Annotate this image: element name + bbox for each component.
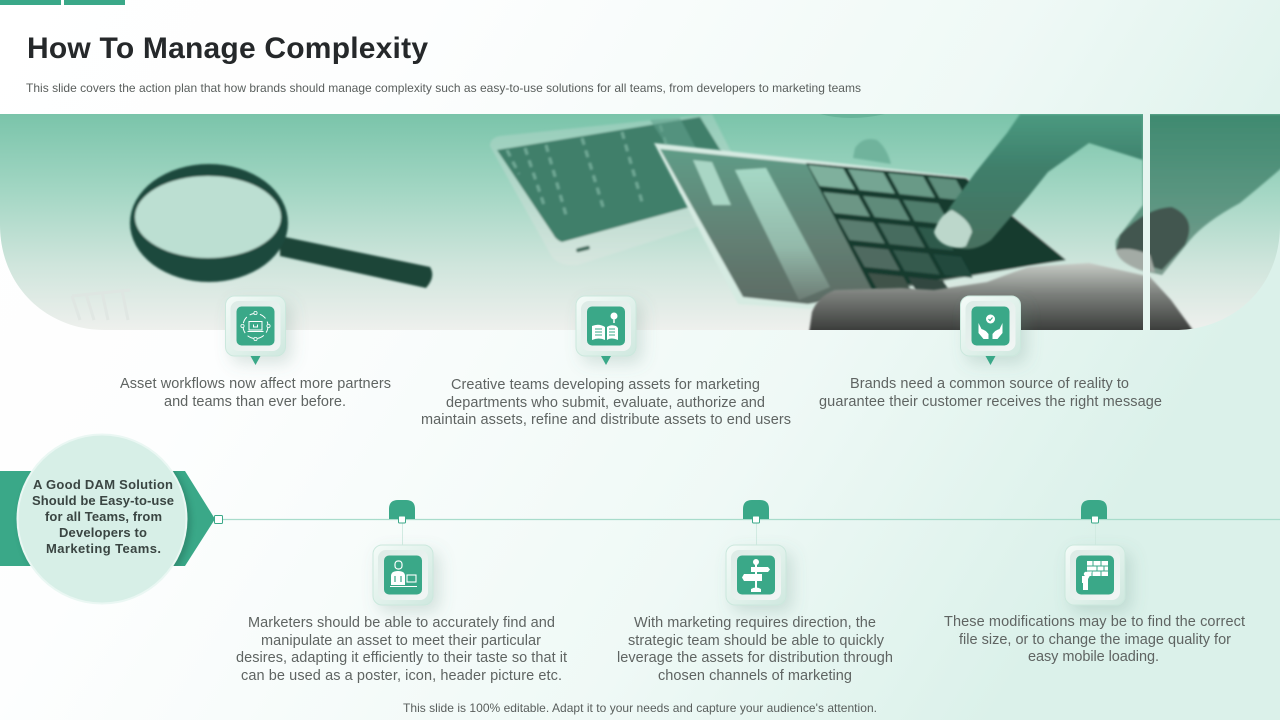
right hand <box>1116 114 1280 275</box>
text: asset workflows <box>120 376 391 410</box>
callout text: Marketing Teams. <box>46 541 161 556</box>
pointer <box>601 356 611 365</box>
text: marketers: can be used as a poster, icon, header picture etc. <box>241 668 562 684</box>
lower hand <box>808 262 1194 330</box>
timeline marker 2 <box>743 500 769 523</box>
text: modifications: file size, or to change the image quality for <box>959 632 1231 648</box>
icon tile: asset workflow <box>226 296 286 365</box>
text: marketing direction: chosen channels of marketing <box>658 668 852 684</box>
text: marketers <box>236 615 567 684</box>
text: modifications: easy mobile loading. <box>1028 649 1159 665</box>
icon tile: marketer at desk <box>373 545 433 605</box>
text: creative teams: departments who submit, evaluate, authorize and <box>446 395 765 411</box>
pointer <box>986 356 996 365</box>
text: creative teams <box>421 377 791 428</box>
text: marketers: manipulate an asset to meet their particular <box>261 633 541 649</box>
text: brands: guarantee their customer receives the right message <box>819 394 1162 410</box>
connector stems <box>402 523 1096 546</box>
text: marketing direction: strategic team should be able to quickly <box>628 633 885 649</box>
text: brands <box>819 376 1162 410</box>
calculator <box>654 143 1067 309</box>
text: creative teams: Creative teams developing assets for marketing <box>451 377 760 393</box>
text: marketers: desires, adapting it efficiently to their taste so that it <box>236 650 567 666</box>
white divider strip <box>1143 114 1150 330</box>
subtitle: This slide covers the action plan that how brands should manage complexity such as easy-to-use solutions for all teams, from developers to marketing teams <box>26 81 861 95</box>
timeline marker 3 <box>1081 500 1107 523</box>
photo banner: magnifier, phone, calculator, hands <box>0 114 1280 340</box>
text: creative teams: maintain assets, refine and distribute assets to end users <box>421 412 791 428</box>
circle callout <box>16 434 188 604</box>
callout text: Should be Easy-to-use <box>32 493 174 508</box>
footer note: This slide is 100% editable. Adapt it to your needs and capture your audience's attention. <box>403 701 877 715</box>
callout text: for all Teams, from <box>45 509 162 524</box>
title: How To Manage Complexity <box>27 32 428 65</box>
callout text: Developers to <box>59 525 147 540</box>
text: brands: Brands need a common source of reality to <box>850 376 1129 392</box>
timeline line <box>218 518 1280 520</box>
icon tile: caring hands <box>960 296 1020 365</box>
pointing finger <box>934 114 1143 249</box>
text: modifications: These modifications may be to find the correct <box>944 614 1245 630</box>
text: asset workflows: and teams than ever before. <box>164 394 346 410</box>
callout text: A Good DAM Solution <box>33 477 173 492</box>
text: marketing direction: With marketing requires direction, the <box>634 615 876 631</box>
icon tile: book and idea <box>576 296 636 365</box>
timeline marker 1 <box>389 500 415 523</box>
calculator keys <box>808 164 974 292</box>
icon tile: brick wall and person <box>1065 545 1125 605</box>
text: marketing direction <box>617 615 893 684</box>
text: marketing direction: leverage the assets for distribution through <box>617 650 893 666</box>
pointer <box>250 356 260 365</box>
phone <box>490 114 745 265</box>
text: asset workflows: Asset workflows now affect more partners <box>120 376 391 392</box>
top accent bars <box>0 0 125 5</box>
arrow end node <box>214 516 222 524</box>
text: marketers: Marketers should be able to accurately find and <box>248 615 555 631</box>
callout text <box>32 477 174 556</box>
magnifying glass <box>130 164 432 288</box>
icon tile: signpost <box>726 545 786 605</box>
text: modifications <box>944 614 1245 665</box>
arrow banner <box>0 471 214 566</box>
